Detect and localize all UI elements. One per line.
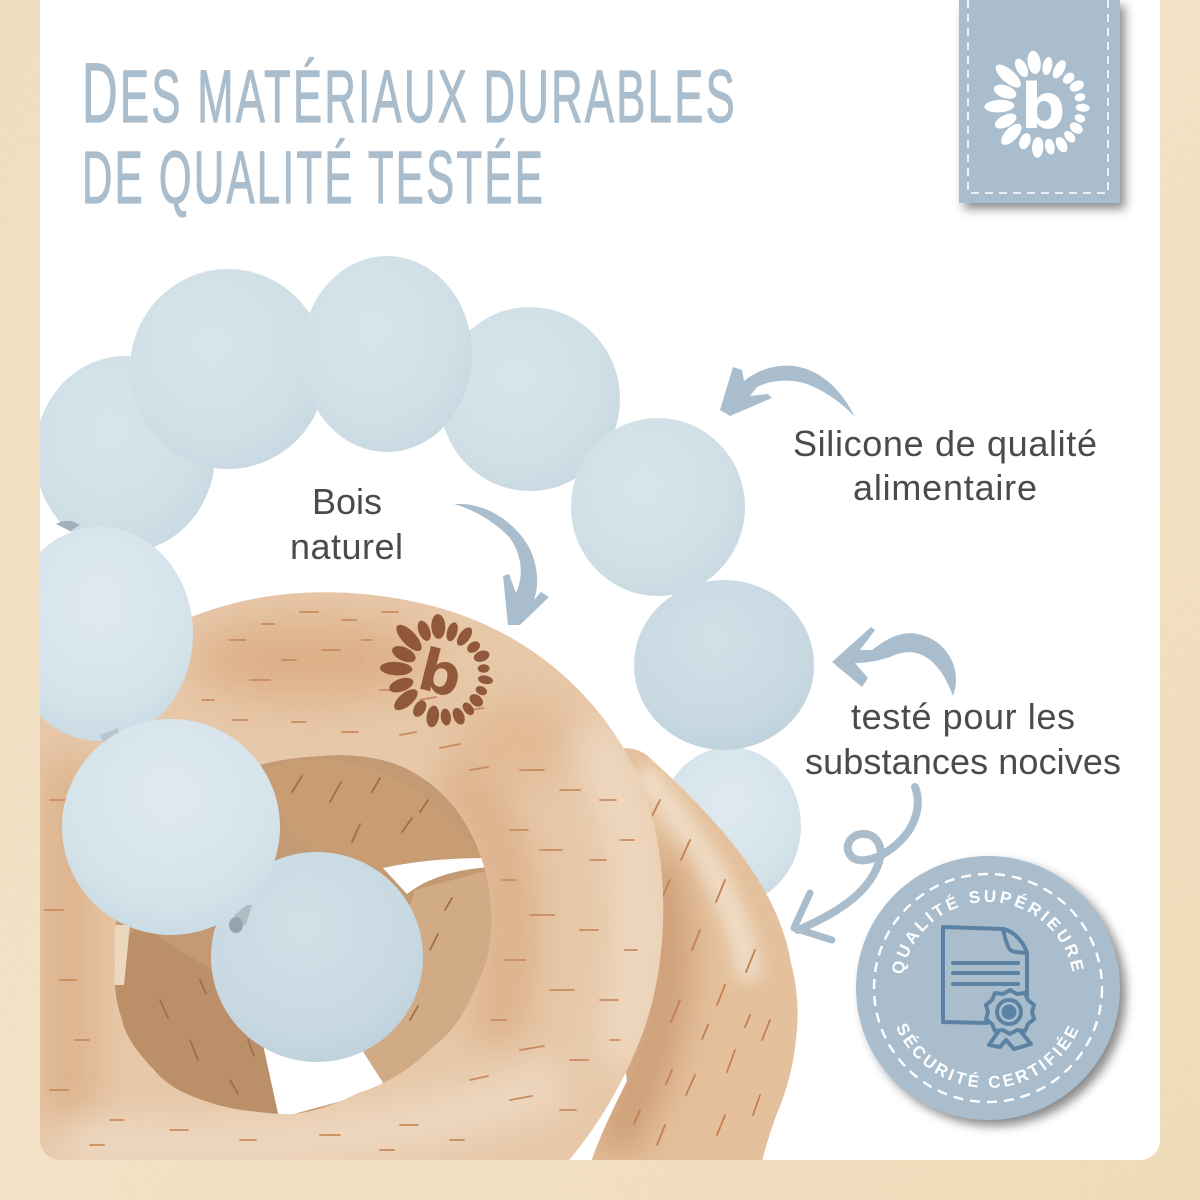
title: DE QUALITÉ TESTÉE <box>82 136 545 219</box>
label: natural wood: naturel <box>290 526 403 567</box>
label: tested for harmful substances: testé pour les <box>851 696 1075 737</box>
view through ring hole <box>114 755 492 1114</box>
product photo: silicone and wood teether <box>7 256 814 1165</box>
icon: certificate with rosette <box>943 927 1034 1049</box>
label: food grade silicone <box>793 423 1097 508</box>
branded wood burn logo: b <box>412 635 469 711</box>
arrow: curly arrow to product <box>794 787 918 940</box>
front wooden ring <box>20 592 663 1165</box>
back wooden ring <box>590 748 798 1165</box>
icon: brand flower logo: b <box>1021 70 1065 143</box>
branded wood burn logo <box>380 614 493 728</box>
certification badge <box>855 855 1133 1133</box>
label: natural wood <box>290 481 403 567</box>
brand tag with logo <box>959 0 1125 209</box>
gap: white through ring <box>383 858 490 894</box>
badge text: bottom arc: SÉCURITÉ CERTIFIÉE <box>897 1024 1078 1088</box>
arrow: silicone label to beads <box>720 366 855 417</box>
label: food grade silicone: Silicone de qualité <box>793 423 1097 464</box>
arrow: wood label to ring <box>454 504 549 625</box>
icon: brand flower logo <box>984 50 1090 158</box>
title <box>82 46 737 219</box>
arrow: tested label to beads <box>832 627 956 696</box>
silicone beads in front <box>7 527 423 1062</box>
badge text: top arc: QUALITÉ SUPÉRIEURE <box>892 890 1084 974</box>
label: food grade silicone: alimentaire <box>853 467 1037 508</box>
silicone bead behind ring <box>673 748 801 894</box>
silicone bead arch <box>35 256 814 750</box>
label: tested for harmful substances <box>805 696 1121 782</box>
title: DES MATÉRIAUX DURABLES <box>82 46 737 140</box>
label: natural wood: Bois <box>312 481 382 522</box>
label: tested for harmful substances: substances nocives <box>805 741 1121 782</box>
